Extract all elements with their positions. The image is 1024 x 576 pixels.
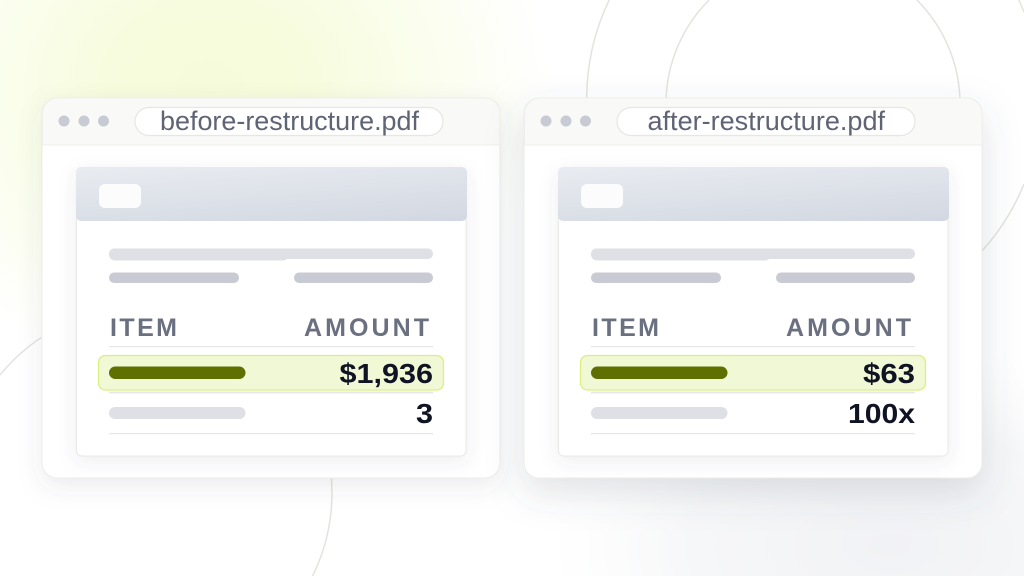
- panel: after window: [524, 98, 982, 478]
- second row: [109, 398, 433, 429]
- highlighted row: [98, 356, 444, 390]
- document card: [76, 170, 466, 456]
- window frame: [42, 98, 500, 478]
- placeholder text lines: [109, 248, 433, 283]
- window frame: [524, 98, 982, 478]
- filename: after-restructure.pdf: [648, 106, 886, 136]
- column heading: amount: AMOUNT: [304, 314, 429, 342]
- filename pill: [617, 108, 915, 136]
- document card: [558, 170, 948, 456]
- window control dots: [540, 116, 591, 126]
- header badge: [581, 184, 623, 208]
- window title bar: [524, 98, 982, 145]
- highlighted row: [580, 356, 926, 390]
- column heading: item: ITEM: [592, 314, 659, 342]
- second row: [591, 398, 915, 429]
- second row: 100x: [848, 398, 915, 429]
- placeholder text lines: [591, 248, 915, 283]
- document header band: [76, 167, 467, 221]
- filename: before-restructure.pdf: [160, 106, 420, 136]
- panel: before window: [42, 98, 500, 478]
- window control dots: [58, 116, 109, 126]
- window title bar: [42, 98, 500, 145]
- column heading: item: ITEM: [110, 314, 177, 342]
- second row: 3: [416, 398, 433, 429]
- highlighted row: $1,936: [340, 358, 433, 389]
- header badge: [99, 184, 141, 208]
- highlighted row: $63: [863, 358, 915, 389]
- column heading: amount: AMOUNT: [786, 314, 911, 342]
- filename pill: [135, 108, 443, 136]
- document header band: [558, 167, 949, 221]
